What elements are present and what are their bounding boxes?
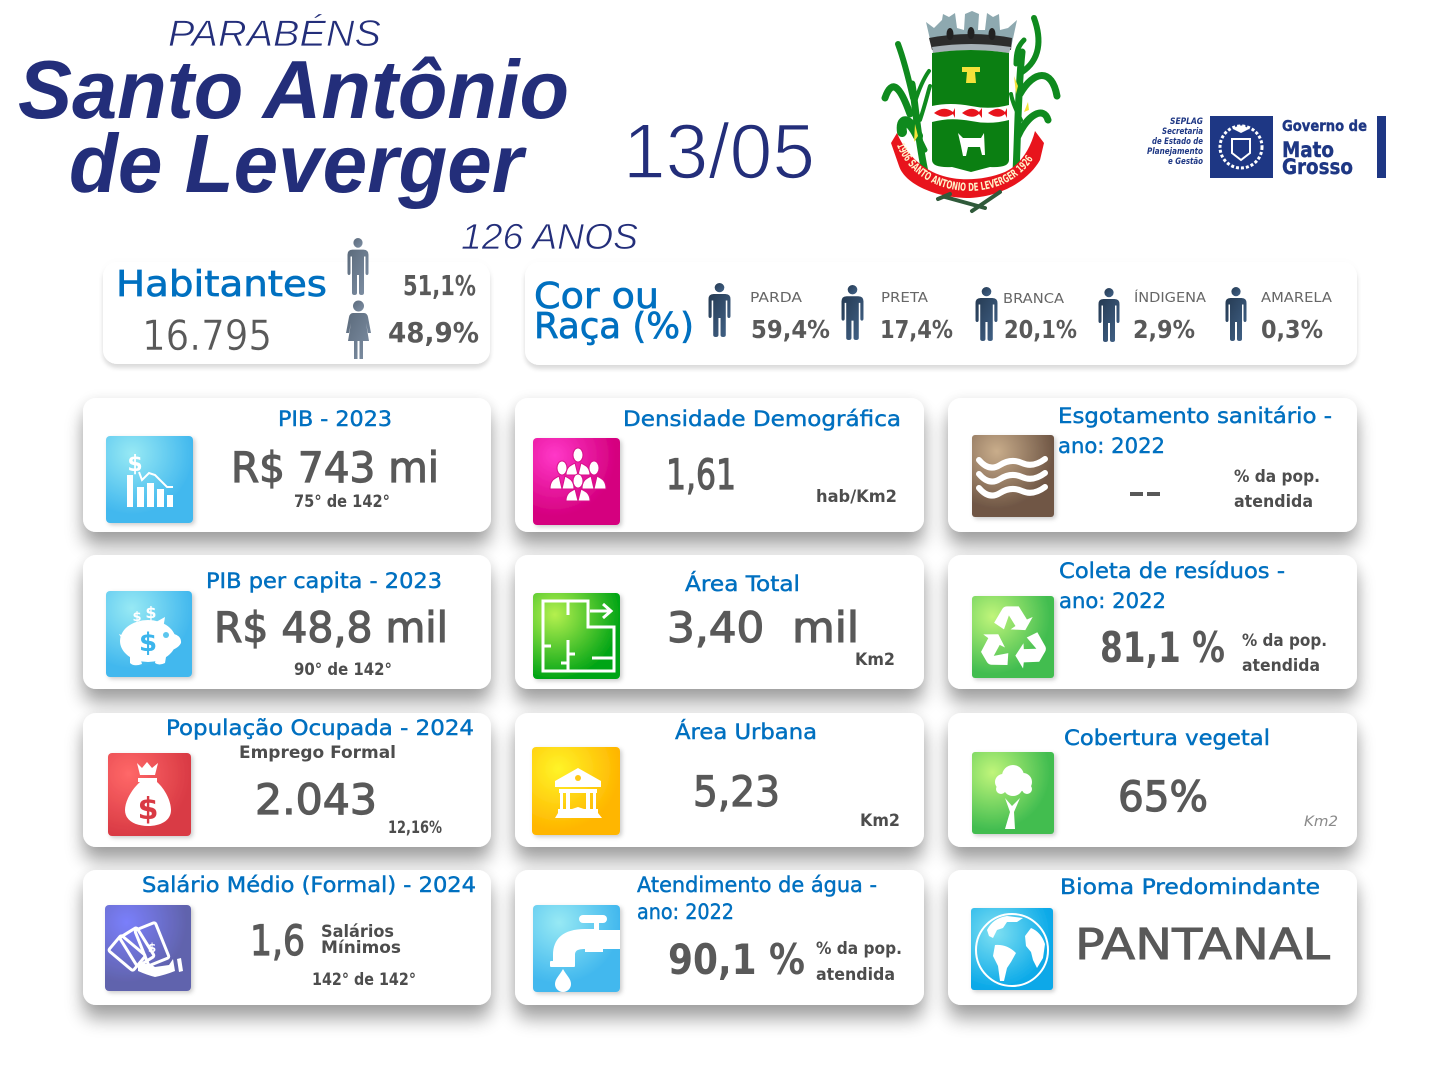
card: cobertura vegetal (948, 713, 1357, 847)
card title: Atendimento de água - (637, 873, 877, 897)
card: atendimento de água (515, 870, 924, 1005)
card background (948, 713, 1357, 847)
card: área total (515, 555, 924, 689)
group: parda: PARDA (750, 290, 803, 306)
population value: 16.795 (142, 311, 272, 360)
ranking: 90° de 142° (294, 660, 392, 679)
card background (948, 870, 1357, 1005)
unit (321, 922, 401, 957)
icon: woman (346, 300, 371, 359)
title: municipality name: de Leverger (69, 117, 528, 210)
SEPLAG caption: de Estado de (1152, 137, 1203, 147)
group: parda (709, 283, 830, 344)
logo wordmark: Mato (1282, 138, 1334, 162)
value: 90,1 % (668, 935, 805, 984)
group: preta (842, 285, 953, 344)
letter T (962, 67, 980, 83)
card: densidade demográfica (515, 398, 924, 532)
icon: floor plan (533, 593, 620, 679)
blue square with state arms (1210, 116, 1273, 178)
unit: % da pop. (1234, 467, 1320, 486)
group: branca: 20,1% (1004, 315, 1077, 344)
card background (515, 713, 924, 847)
unit: % da pop. (816, 939, 902, 958)
sugar cane left (885, 44, 930, 172)
group: amarela (1226, 287, 1333, 344)
value (1130, 492, 1160, 496)
cor ou raça heading: Cor ou (534, 276, 659, 317)
card title (1058, 404, 1332, 458)
card: salário médio (83, 870, 491, 1005)
icon: bar chart with dollar: $ (127, 452, 143, 477)
subtitle: Emprego Formal (239, 743, 396, 762)
card title: ano: 2022 (637, 900, 734, 924)
unit (1234, 467, 1320, 511)
value: 1,6 (250, 916, 305, 965)
group: preta: 17,4% (880, 315, 953, 344)
icon: municipal coat of arms (882, 11, 1060, 214)
group: branca: BRANCA (1003, 291, 1065, 307)
unit: Salários (321, 922, 394, 941)
female percentage: 48,9% (388, 316, 479, 349)
card title: População Ocupada - 2024 (166, 716, 474, 740)
group: parda: 59,4% (751, 315, 830, 344)
panel background (103, 262, 490, 364)
card: bioma predominante (948, 870, 1357, 1005)
group: amarela: AMARELA (1261, 290, 1333, 306)
icon: waves (972, 435, 1054, 517)
logo: Governo de Mato Grosso / SEPLAG (1147, 116, 1386, 179)
SEPLAG caption: SEPLAG (1170, 117, 1203, 127)
card background (948, 555, 1357, 689)
unit: Km2 (860, 811, 900, 830)
card background (83, 398, 491, 532)
ribbon motto: 1906 SANTO ANTONIO DE LEVERGER 1926 (897, 142, 1032, 191)
unit: atendida (816, 965, 895, 984)
fish (934, 108, 1007, 118)
card: PIB per capita (83, 555, 491, 689)
icon: globe (971, 908, 1053, 990)
card: esgotamento sanitário (948, 398, 1357, 532)
logo wordmark: Governo de (1282, 117, 1367, 135)
panel: habitantes (103, 238, 490, 364)
card background (83, 713, 491, 847)
SEPLAG caption: Secretaria (1162, 127, 1203, 137)
group: preta: PRETA (881, 290, 929, 306)
sugar cane right (1011, 18, 1057, 172)
unit (1242, 631, 1327, 675)
card: PIB (83, 398, 491, 532)
value: 2.043 (255, 775, 377, 824)
card: área urbana (515, 713, 924, 847)
unit: % da pop. (1242, 631, 1327, 650)
date: 13/05 (623, 107, 815, 195)
panel: cor ou raça (525, 262, 1357, 365)
card background (515, 870, 924, 1005)
card: população ocupada (83, 713, 491, 847)
group: amarela: 0,3% (1261, 315, 1323, 344)
crossed stems (938, 192, 1000, 211)
card title: Esgotamento sanitário - (1058, 404, 1332, 428)
panel background (525, 262, 1357, 365)
unit: atendida (1234, 492, 1313, 511)
icon: piggy bank: $ (132, 610, 142, 625)
card title: Cobertura vegetal (1064, 726, 1270, 750)
icon: tree (972, 752, 1054, 834)
group: indígena (1098, 288, 1207, 344)
card title: ano: 2022 (1058, 434, 1165, 458)
value: R$ 48,8 mil (214, 603, 448, 652)
title: municipality name: Santo Antônio (18, 43, 569, 136)
card title: Salário Médio (Formal) - 2024 (142, 873, 476, 897)
heading: parabéns: PARABÉNS (168, 13, 381, 54)
crown (926, 11, 1017, 48)
icon: money bag (108, 753, 191, 836)
SEPLAG caption: Planejamento (1147, 147, 1203, 157)
value: R$ 743 mi (231, 443, 439, 492)
icon: recycle (972, 596, 1054, 678)
card background (83, 870, 491, 1005)
card title: Bioma Predomindante (1060, 875, 1320, 899)
card title: Coleta de resíduos - (1059, 559, 1285, 583)
heading: 126 anos: 126 ANOS (461, 216, 638, 257)
percentage: 12,16% (388, 818, 442, 837)
title: municipality name (18, 43, 569, 210)
ranking: 142° de 142° (312, 970, 416, 989)
cor ou raça heading (534, 276, 694, 347)
unit: hab/Km2 (816, 487, 897, 506)
group: indígena: 2,9% (1133, 315, 1195, 344)
habitantes heading: Habitantes (116, 264, 327, 305)
logo wordmark: Grosso (1282, 155, 1353, 179)
icon: piggy bank (106, 591, 192, 677)
icon: piggy bank: $ (145, 603, 157, 622)
icon: public building (532, 747, 620, 835)
cor ou raça heading: Raça (%) (534, 306, 694, 347)
value: 5,23 (693, 767, 780, 816)
cow (958, 133, 985, 156)
card background (515, 555, 924, 689)
card background (515, 398, 924, 532)
card title (1059, 559, 1285, 613)
unit: atendida (1242, 656, 1320, 675)
unit: Km2 (1304, 814, 1338, 830)
card background (83, 555, 491, 689)
card title: ano: 2022 (1059, 589, 1166, 613)
SEPLAG caption (1147, 117, 1203, 167)
card title: PIB - 2023 (278, 407, 392, 431)
red ribbon (891, 131, 1044, 198)
ranking: 75° de 142° (294, 492, 390, 511)
icon: piggy bank: $ (139, 628, 157, 658)
male percentage: 51,1% (403, 269, 476, 302)
logo wordmark (1282, 117, 1367, 179)
card title: Densidade Demográfica (623, 407, 901, 431)
icon: cash in hand: $ (148, 941, 156, 955)
unit: Km2 (855, 650, 895, 669)
value: 81,1 % (1100, 623, 1225, 672)
icon: money bag: $ (138, 792, 158, 827)
card title: Área Total (685, 571, 800, 596)
value: 1,61 (666, 450, 736, 499)
value: 65% (1118, 772, 1208, 821)
card title: PIB per capita - 2023 (206, 569, 442, 593)
shield (932, 50, 1009, 172)
SEPLAG caption: e Gestão (1168, 157, 1203, 167)
icon: cash in hand (105, 905, 191, 991)
card background (948, 398, 1357, 532)
icon: water tap (533, 905, 620, 992)
value: 3,40 mil (667, 603, 859, 652)
group: branca (976, 287, 1077, 344)
card title: Área Urbana (675, 719, 817, 744)
icon: bar chart with dollar (106, 436, 193, 523)
card title (637, 873, 877, 924)
unit: Mínimos (321, 938, 401, 957)
icon: man (348, 238, 368, 295)
value: PANTANAL (1075, 920, 1330, 970)
icon: people (533, 438, 620, 525)
unit (816, 939, 902, 984)
card: coleta de resíduos (948, 555, 1357, 689)
group: indígena: ÍNDIGENA (1134, 289, 1207, 306)
